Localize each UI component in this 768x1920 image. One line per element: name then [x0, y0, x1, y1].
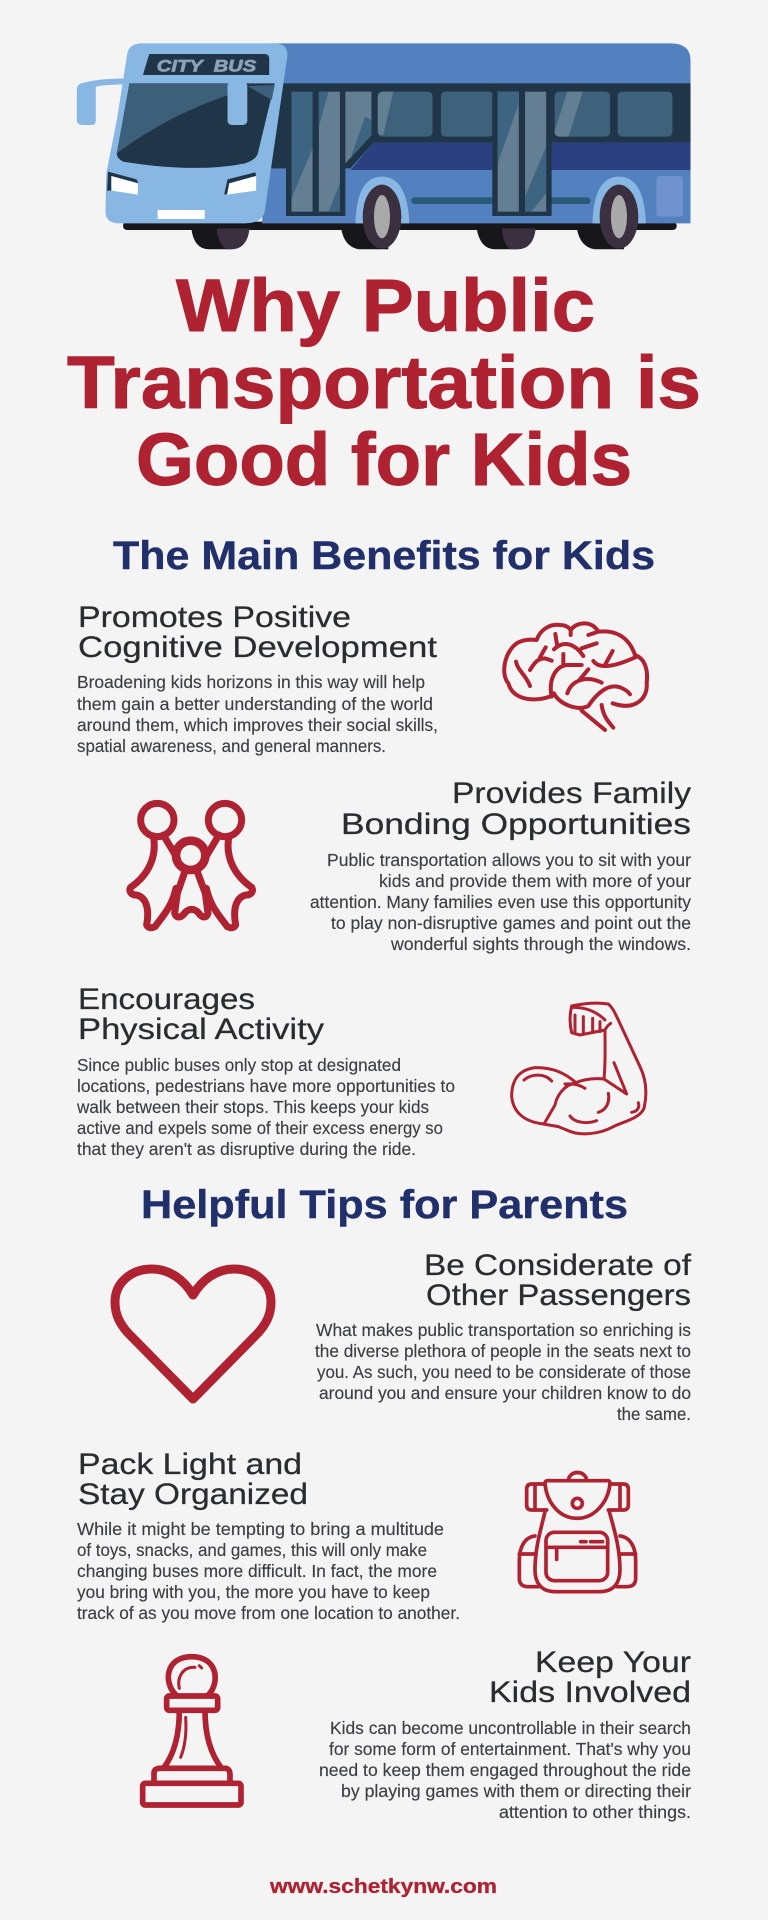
- body text: around you and ensure your children know to do: [319, 1383, 691, 1403]
- heading: Bonding Opportunities: [341, 808, 691, 841]
- heading: Provides Family: [452, 777, 691, 810]
- icon: heart: [115, 1269, 271, 1399]
- body text: What makes public transportation so enriching is: [316, 1320, 691, 1340]
- heading: the main benefits: The Main Benefits for Kids: [113, 534, 655, 578]
- body text: walk between their stops. This keeps your kids: [76, 1097, 429, 1117]
- body text: attention. Many families even use this opportunity: [310, 892, 691, 912]
- icon: chess pawn: [143, 1657, 241, 1805]
- body text: by playing games with them or directing their: [341, 1781, 691, 1801]
- panel: family bonding: [130, 777, 691, 954]
- heading: [78, 601, 437, 664]
- heading: Promotes Positive: [78, 601, 351, 634]
- body text: for some form of entertainment. That's why you: [329, 1739, 691, 1759]
- body text: the diverse plethora of people in the seats next to: [315, 1341, 691, 1361]
- body text: attention to other things.: [499, 1802, 691, 1822]
- panel: physical activity: [76, 983, 646, 1159]
- body text: you bring with you, the more you have to keep: [77, 1582, 430, 1602]
- heading: [489, 1646, 691, 1709]
- heading: [78, 1448, 308, 1511]
- body text: need to keep them engaged throughout the ride: [319, 1760, 691, 1780]
- icon: family: [130, 803, 252, 928]
- heading: Stay Organized: [78, 1478, 308, 1511]
- panel: keep kids involved: [143, 1646, 691, 1822]
- body text: of toys, snacks, and games, this will only make: [77, 1540, 427, 1560]
- heading: [424, 1249, 692, 1312]
- title: [67, 264, 701, 501]
- body text: [315, 1320, 691, 1424]
- title: Good for Kids: [136, 418, 632, 501]
- icon: flexed arm: [512, 1003, 646, 1134]
- panel: considerate of passengers: [115, 1249, 692, 1424]
- body text: While it might be tempting to bring a multitude: [77, 1519, 444, 1539]
- heading: Encourages: [78, 983, 255, 1016]
- body text: Public transportation allows you to sit with your: [327, 850, 691, 870]
- illustration: city bus: [77, 43, 691, 249]
- heading: Be Considerate of: [424, 1249, 692, 1282]
- title: Why Public: [176, 264, 595, 347]
- body text: [76, 1055, 455, 1159]
- body text: track of as you move from one location to another.: [77, 1603, 460, 1623]
- body text: that they aren't as disruptive during the ride.: [77, 1139, 416, 1159]
- icon: backpack: [519, 1472, 636, 1592]
- title: Transportation is: [67, 341, 701, 424]
- body text: [310, 850, 691, 954]
- body text: them gain a better understanding of the world: [77, 694, 433, 714]
- body text: active and expels some of their excess energy so: [77, 1118, 443, 1138]
- footer: website: www.schetkynw.com: [269, 1876, 497, 1898]
- panel: cognitive development: [77, 601, 647, 756]
- heading: [78, 983, 324, 1046]
- heading: Cognitive Development: [78, 631, 437, 664]
- body text: Kids can become uncontrollable in their search: [330, 1718, 691, 1738]
- body text: changing buses more difficult. In fact, the more: [77, 1561, 437, 1581]
- heading: Pack Light and: [78, 1448, 302, 1481]
- body text: [77, 672, 438, 756]
- body text: [77, 1519, 460, 1623]
- heading: helpful tips: Helpful Tips for Parents: [141, 1183, 628, 1227]
- body text: you. As such, you need to be considerate of those: [317, 1362, 691, 1382]
- panel: pack light: [77, 1448, 636, 1623]
- body text: kids and provide them with more of your: [379, 871, 691, 891]
- body text: wonderful sights through the windows.: [390, 934, 691, 954]
- body text: around them, which improves their social skills,: [77, 715, 438, 735]
- icon: brain: [504, 623, 647, 730]
- body text: locations, pedestrians have more opportunities to: [77, 1076, 455, 1096]
- body text: Broadening kids horizons in this way will help: [77, 672, 425, 692]
- heading: Other Passengers: [426, 1279, 691, 1312]
- body text: [319, 1718, 691, 1822]
- body text: to play non-disruptive games and point out the: [331, 913, 691, 933]
- heading: Physical Activity: [78, 1013, 324, 1046]
- illustration: city bus: CITY BUS: [157, 57, 257, 76]
- heading: [341, 777, 691, 841]
- body text: Since public buses only stop at designated: [77, 1055, 401, 1075]
- heading: Keep Your: [535, 1646, 691, 1679]
- body text: spatial awareness, and general manners.: [77, 736, 386, 756]
- heading: Kids Involved: [489, 1676, 691, 1709]
- body text: the same.: [617, 1404, 691, 1424]
